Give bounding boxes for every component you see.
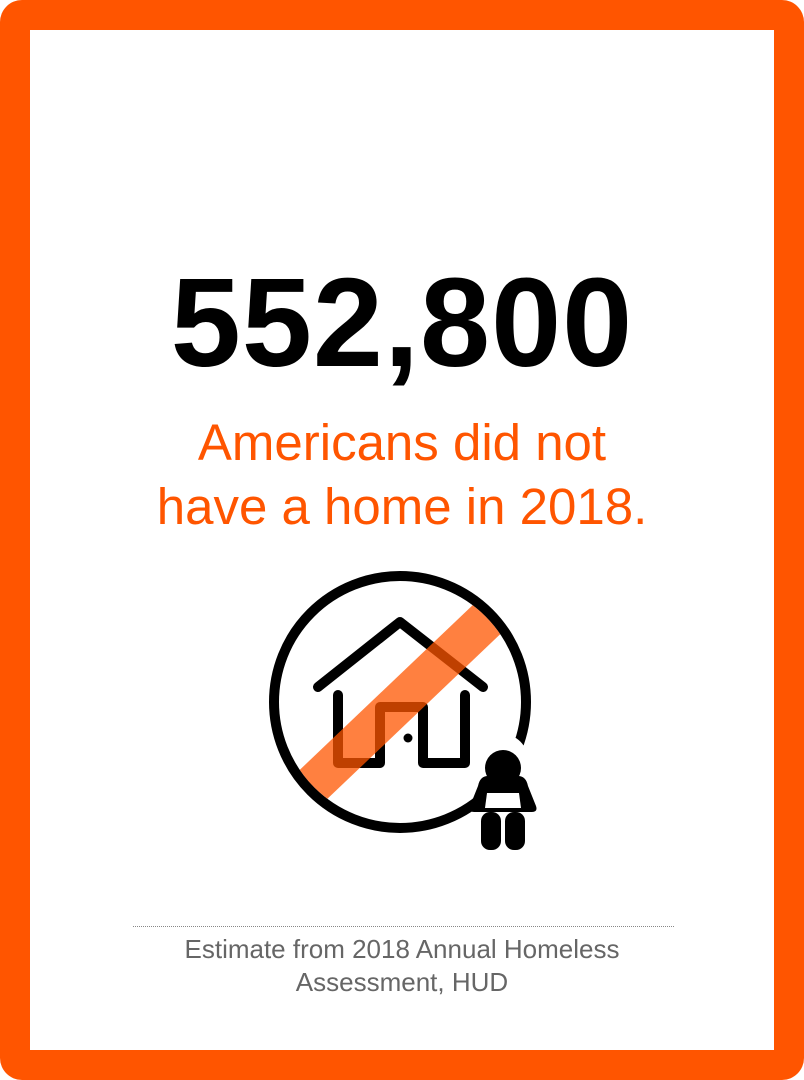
subtitle	[157, 414, 647, 535]
subtitle: Americans did not	[198, 414, 606, 471]
icon: no home	[269, 571, 536, 850]
subtitle: have a home in 2018.	[157, 478, 647, 535]
source note: Estimate from 2018 Annual Homeless	[184, 934, 620, 964]
headline number: 552,800	[171, 252, 633, 393]
source note	[184, 934, 620, 997]
source note: Assessment, HUD	[296, 967, 508, 997]
divider	[133, 926, 674, 927]
